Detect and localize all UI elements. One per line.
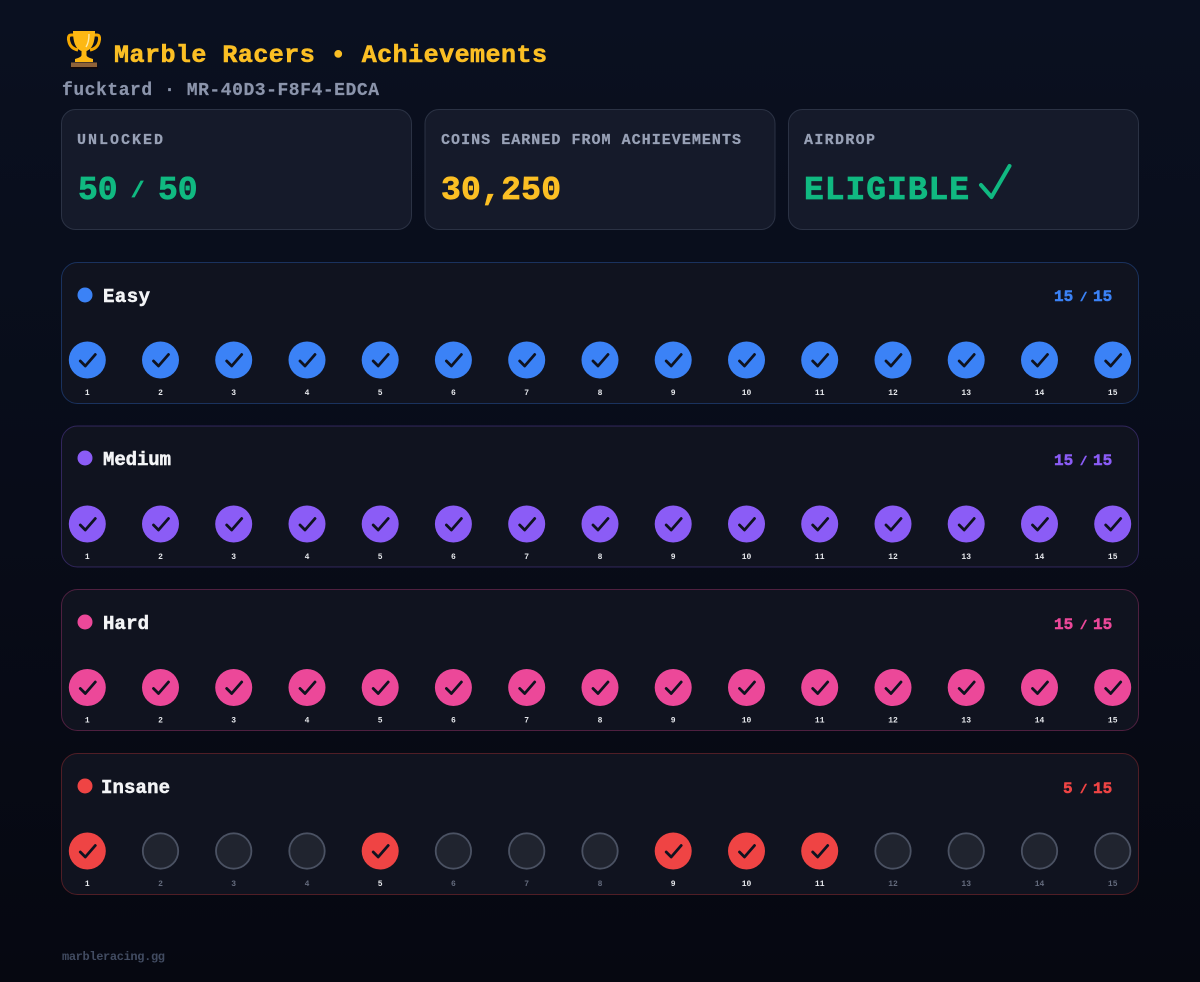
label: coins earned: COINS EARNED FROM ACHIEVEMENTS (441, 132, 741, 149)
progress count: easy: / (1080, 291, 1087, 305)
badges: medium: 12 (888, 553, 898, 562)
badges: medium: 8 (598, 553, 603, 562)
badges: insane: 5 (378, 880, 383, 889)
badges: insane: 3 (231, 880, 236, 889)
icon: trophy (68, 31, 100, 68)
badges: medium: 7 (524, 553, 529, 562)
badges: easy: 8 (598, 389, 603, 398)
value: 50 / 50: 50 (78, 172, 118, 209)
badges: hard: 14 (1035, 716, 1044, 726)
badges: insane: 7 (524, 880, 529, 889)
panel: coins earned (425, 110, 775, 230)
badges: medium: 4 (305, 553, 310, 562)
badges: insane: 9 (671, 880, 676, 889)
badges: easy: 4 (305, 389, 310, 398)
progress count: insane: 5 (1063, 780, 1073, 798)
progress count: insane: 15 (1093, 780, 1112, 798)
title: Marble Racers • Achievements (114, 41, 547, 70)
badges: hard (69, 669, 1131, 726)
badges: insane: 2 (158, 880, 163, 889)
progress count: medium: / (1080, 455, 1087, 469)
badges: hard: 15 (1108, 716, 1118, 726)
badges: hard: 6 (451, 716, 456, 726)
badges: easy: 6 (451, 389, 456, 398)
badges: insane: 11 (815, 880, 825, 889)
label: unlocked: UNLOCKED (77, 132, 163, 149)
badges: easy: 5 (378, 389, 383, 398)
badges: easy: 14 (1035, 389, 1044, 398)
progress count: medium: 15 (1054, 452, 1073, 470)
badges: hard: 10 (742, 716, 751, 726)
badges: hard: 9 (671, 716, 676, 726)
icon: eligible check (981, 166, 1010, 197)
badges: easy: 11 (815, 389, 825, 398)
badges: medium: 15 (1108, 553, 1118, 562)
heading: hard: Hard (103, 613, 149, 635)
badges: easy: 7 (524, 389, 529, 398)
heading: insane: Insane (101, 777, 170, 799)
badges: hard: 2 (158, 716, 163, 726)
badges: easy: 13 (961, 389, 971, 398)
badges: easy: 10 (742, 389, 751, 398)
progress count: medium: 15 (1093, 452, 1112, 470)
badges: medium: 14 (1035, 553, 1044, 562)
heading: medium: Medium (103, 449, 171, 471)
progress count: easy: 15 (1054, 288, 1073, 306)
badges: easy: 1 (85, 389, 90, 398)
value: 50 / 50: / (131, 179, 144, 204)
badges: insane: 13 (961, 880, 971, 889)
badges: easy: 3 (231, 389, 236, 398)
badges: hard: 4 (305, 716, 310, 726)
badges: insane: 6 (451, 880, 456, 889)
badges: easy: 12 (888, 389, 898, 398)
badges: insane: 12 (888, 880, 898, 889)
footer: marbleracing.gg (62, 950, 165, 964)
badges: medium (69, 506, 1131, 562)
badges: hard: 5 (378, 716, 383, 726)
badges: hard: 13 (961, 716, 971, 726)
progress count: easy: 15 (1093, 288, 1112, 306)
badges: easy: 2 (158, 389, 163, 398)
heading: easy (78, 286, 151, 308)
progress count: hard: 15 (1054, 616, 1073, 634)
progress count: hard: / (1080, 619, 1087, 633)
badges: insane: 1 (85, 880, 90, 889)
panel: airdrop (788, 110, 1138, 230)
badges: hard: 12 (888, 716, 898, 726)
badges: easy (69, 342, 1131, 398)
panel: insane (62, 754, 1138, 894)
badges: hard: 3 (231, 716, 236, 726)
header (62, 31, 547, 101)
badges: medium: 13 (961, 553, 971, 562)
badges: insane: 15 (1108, 880, 1118, 889)
badges: medium: 11 (815, 553, 825, 562)
badges: insane: 10 (742, 880, 751, 889)
heading: easy: Easy (103, 286, 151, 308)
panel: unlocked (62, 110, 412, 230)
badges: medium: 6 (451, 553, 456, 562)
value: eligible: ELIGIBLE (804, 172, 969, 209)
label: airdrop: AIRDROP (804, 132, 875, 149)
badges: medium: 5 (378, 553, 383, 562)
subtitle: fucktard · MR-40D3-F8F4-EDCA (62, 81, 379, 101)
badges: medium: 9 (671, 553, 676, 562)
badges: medium: 1 (85, 553, 90, 562)
badges: insane (69, 832, 1130, 889)
badges: hard: 7 (524, 716, 529, 726)
progress count: insane: / (1080, 783, 1087, 797)
badges: hard: 8 (598, 716, 603, 726)
progress count: hard: 15 (1093, 616, 1112, 634)
panel: medium (62, 426, 1138, 567)
badges: insane: 4 (305, 880, 310, 889)
badges: hard: 1 (85, 716, 90, 726)
panel: easy (62, 262, 1138, 404)
badges: hard: 11 (815, 716, 825, 726)
badges: medium: 3 (231, 553, 236, 562)
badges: insane: 14 (1035, 880, 1044, 889)
value: 30,250: 30,250 (441, 172, 561, 209)
panel: hard (62, 590, 1138, 730)
heading: hard (78, 613, 149, 635)
badges: easy: 9 (671, 389, 676, 398)
value: 50 / 50: 50 (158, 172, 198, 209)
badges: easy: 15 (1108, 389, 1118, 398)
badges: insane: 8 (598, 880, 603, 889)
badges: medium: 2 (158, 553, 163, 562)
badges: medium: 10 (742, 553, 751, 562)
